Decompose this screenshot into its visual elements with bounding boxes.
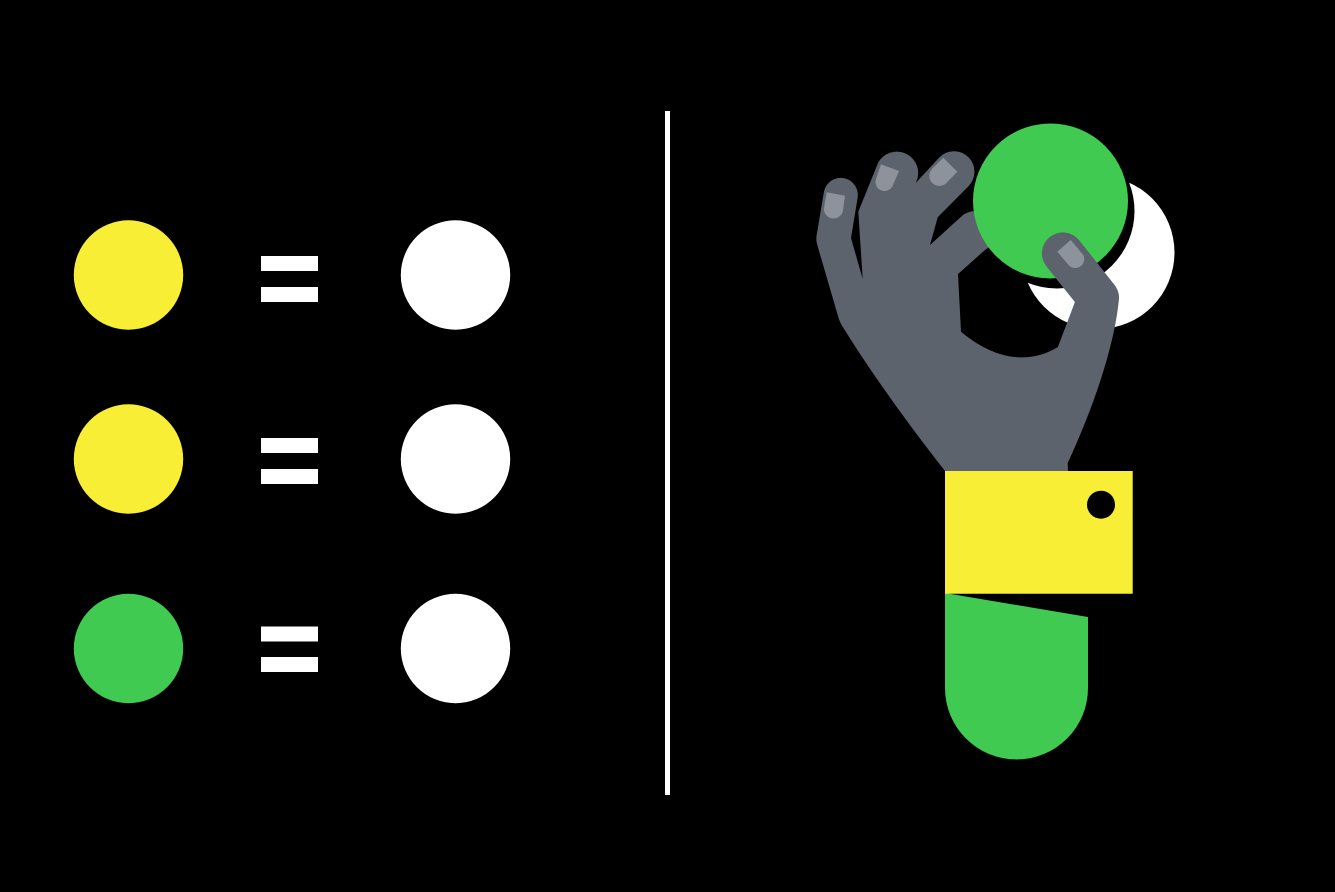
black shadow circle	[980, 134, 1134, 288]
fingernail: little finger	[824, 192, 845, 219]
fingernail: ring finger	[875, 164, 899, 191]
white circle behind the hand	[1022, 176, 1174, 329]
panel: hand illustration	[816, 124, 1174, 760]
panel: colour equivalences	[74, 220, 510, 703]
row 1: yellow equals white	[74, 220, 510, 330]
row 3: green equals white	[74, 594, 510, 703]
fingernail: middle finger	[929, 158, 957, 186]
fingernail: thumb	[1057, 240, 1084, 268]
thumb over the green circle	[1042, 232, 1119, 347]
hand and fingers	[816, 151, 1119, 472]
yellow cuff with button hole	[945, 471, 1133, 594]
row 2: yellow equals white	[74, 404, 510, 514]
vertical divider	[665, 111, 670, 795]
green circle held by the fingers	[973, 124, 1128, 278]
sleeve: green	[945, 593, 1088, 760]
